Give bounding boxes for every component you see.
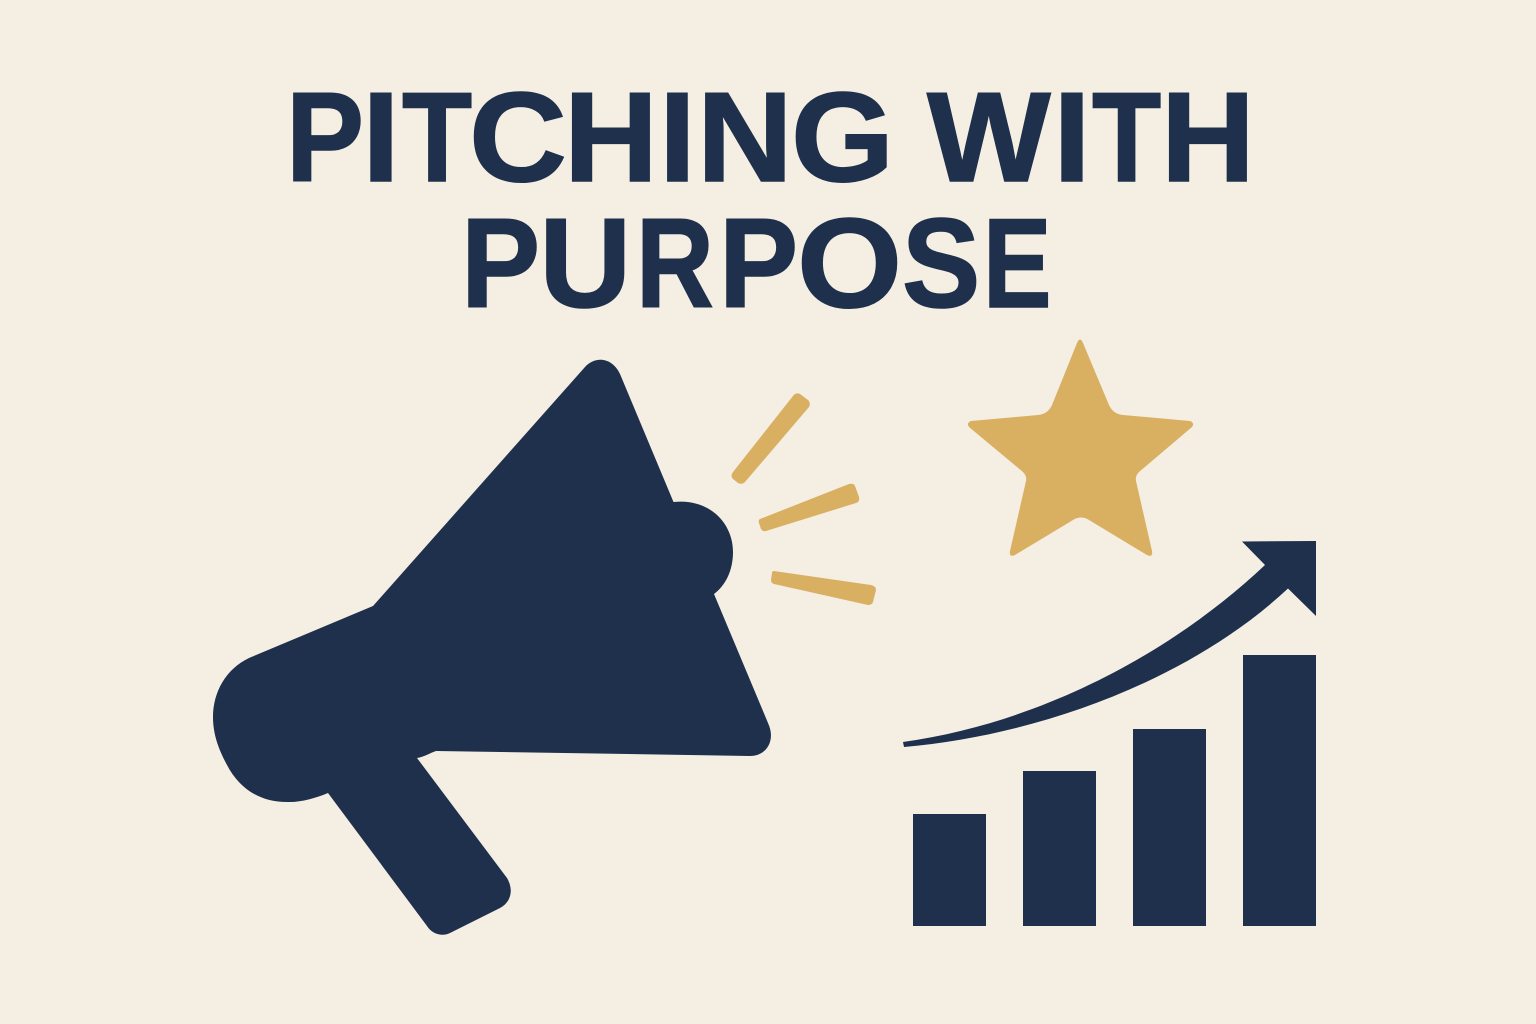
title: W [927, 67, 1051, 209]
title: T [402, 67, 472, 209]
title: I [362, 67, 400, 209]
title: N [697, 67, 792, 209]
chart: growth arrow [903, 541, 1316, 747]
title [286, 67, 1255, 335]
title: I [1053, 67, 1091, 209]
icon: megaphone [213, 360, 771, 935]
title: E [983, 193, 1051, 335]
icon: sound lines [732, 393, 876, 605]
title: P [286, 67, 364, 209]
title: U [539, 193, 631, 335]
title: G [791, 67, 894, 209]
title: O [797, 193, 902, 335]
title: I [659, 67, 696, 209]
bar chart [913, 655, 1316, 926]
title: S [902, 193, 980, 335]
title: R [636, 193, 713, 335]
title: H [564, 67, 658, 209]
title: P [461, 193, 540, 335]
title: H [1161, 67, 1255, 209]
title: C [469, 67, 567, 209]
icon: star [968, 340, 1193, 556]
title: T [1092, 67, 1161, 209]
title: P [719, 193, 798, 335]
